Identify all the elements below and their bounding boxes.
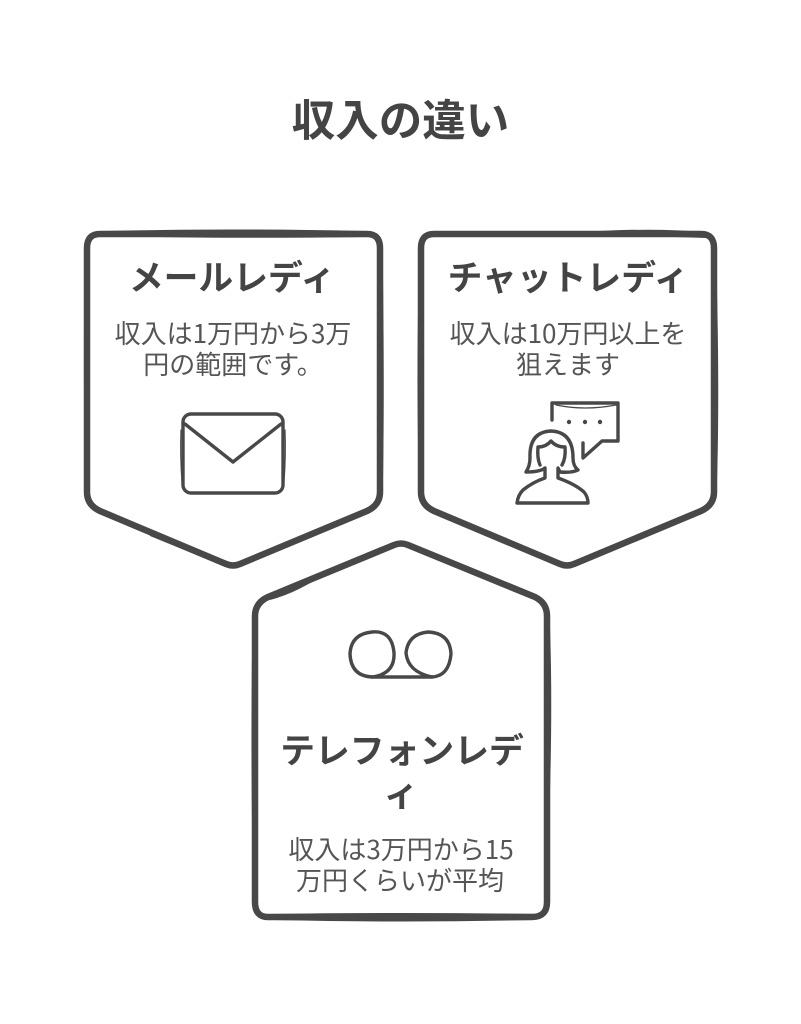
panel: mail lady: [85, 230, 383, 567]
panel: chat lady: [418, 230, 718, 565]
text: chat lady income: 収入は10万円以上を: [450, 314, 686, 351]
text: mail lady income line 2: 円の範囲です。: [143, 345, 323, 382]
icon: envelope: [181, 414, 285, 493]
heading: telephone lady line 2: ィ: [384, 767, 418, 817]
text: telephone lady income: 収入は3万円から15: [288, 830, 514, 867]
text: chat lady income line 2: 狙えます: [516, 345, 620, 382]
heading: telephone lady: テレフォンレデ: [280, 724, 524, 774]
title: 収入の違い: [292, 86, 509, 149]
panel outline: chat lady: [421, 234, 714, 566]
sketch strokes: chat lady: [418, 230, 718, 490]
panel: telephone lady: [252, 544, 550, 922]
panel outline: mail lady: [87, 234, 380, 566]
icon: voicemail: [350, 632, 451, 677]
heading: chat lady: チャットレディ: [448, 251, 688, 301]
text: mail lady income: 収入は1万円から3万: [115, 314, 351, 351]
icon: woman with speech bubble: [517, 403, 618, 503]
text: telephone lady income line 2: 万円くらいが平均: [296, 861, 504, 898]
heading: mail lady: メールレディ: [129, 251, 335, 301]
sketch strokes: telephone lady: [252, 552, 550, 922]
sketch strokes: mail lady: [85, 230, 383, 567]
panel outline: telephone lady: [255, 544, 547, 917]
